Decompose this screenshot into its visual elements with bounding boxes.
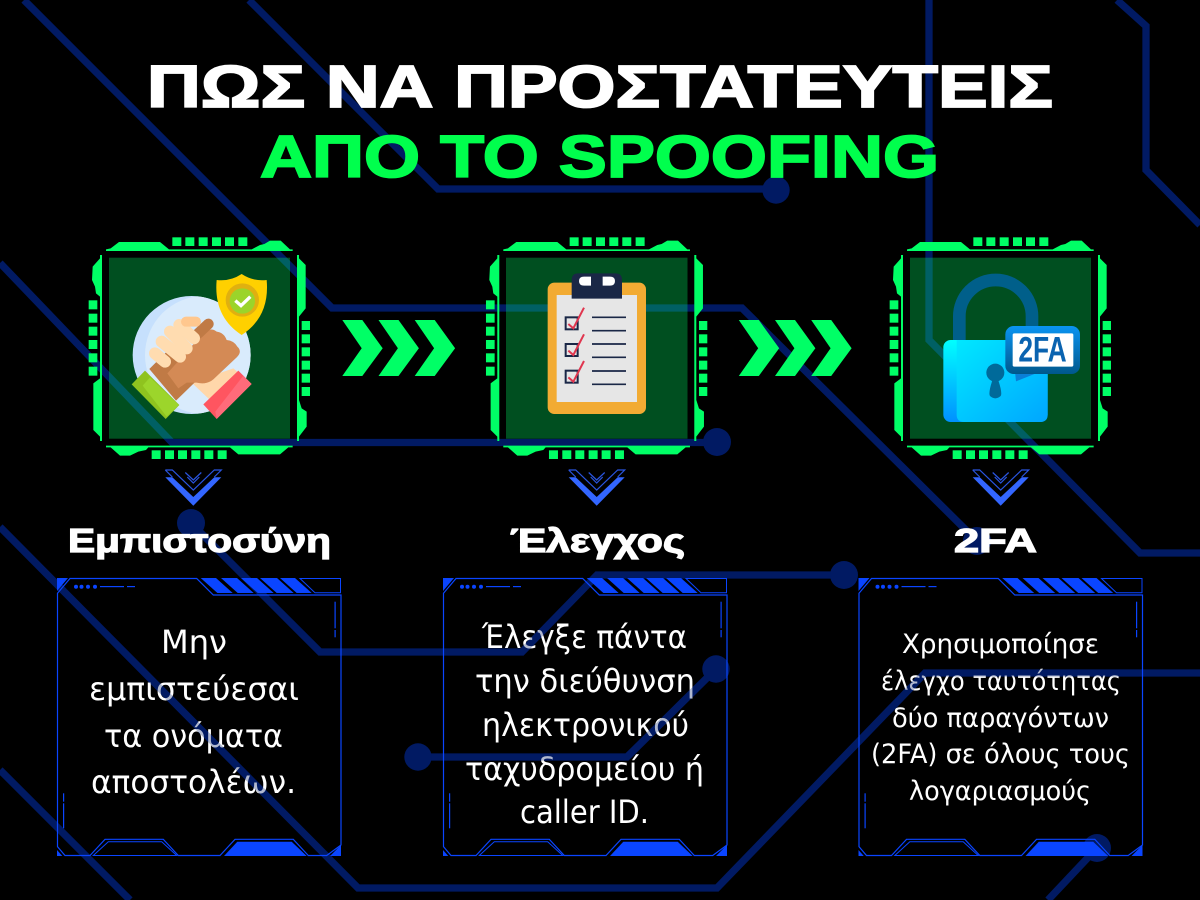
text block: trust: τα ονόματα <box>104 717 283 755</box>
card frame 1 <box>57 578 341 856</box>
text block: trust: αποστολέων. <box>91 763 296 801</box>
text block: 2FA: έλεγχο ταυτότητας <box>881 666 1121 697</box>
text block: check: caller ID. <box>520 793 649 831</box>
arrow: chevrons 1 <box>342 320 455 376</box>
icon tile <box>910 258 1091 439</box>
title line 2: ΑΠΟ ΤΟ SPOOFING <box>260 124 939 190</box>
heading: check: Έλεγχος <box>510 522 685 559</box>
icon frame <box>890 237 1111 459</box>
title line 1: ΠΩΣ ΝΑ ΠΡΟΣΤΑΤΕΥΤΕΙΣ <box>147 54 1053 120</box>
icon tile <box>109 258 290 439</box>
text block: trust <box>89 623 299 801</box>
icon: padlock with 2FA badge <box>943 280 1080 422</box>
line overlay dimming card text <box>149 630 1119 810</box>
icon tile <box>506 258 688 439</box>
text block: check: Έλεγξε πάντα <box>481 618 687 656</box>
text block: 2FA: Χρησιμοποίησε <box>902 629 1099 660</box>
text block: 2FA <box>871 629 1130 807</box>
heading: trust: Εμπιστοσύνη <box>68 522 331 559</box>
text block: 2FA: λογαριασμούς <box>909 776 1091 807</box>
arrow: down chevron 3 <box>973 470 1029 506</box>
arrow: down chevron 1 <box>165 470 221 506</box>
text block: trust: Μην <box>161 623 227 661</box>
arrow: down chevron 2 <box>569 470 625 506</box>
panel: trust icon <box>89 237 310 459</box>
panel: 2FA icon <box>890 237 1111 459</box>
text block: check: ταχυδρομείου ή <box>465 750 704 788</box>
text block: check <box>465 618 704 831</box>
panel: checklist icon <box>486 237 707 459</box>
text block: trust: εμπιστεύεσαι <box>89 670 299 708</box>
text block: 2FA: δύο παραγόντων <box>892 703 1109 734</box>
card frame 2 <box>443 578 727 856</box>
text block: check: την διεύθυνση <box>475 662 695 700</box>
icon frame <box>486 237 707 459</box>
text block: 2FA: (2FA) σε όλους τους <box>871 739 1130 770</box>
icon: padlock with 2FA badge: 2FA <box>1018 331 1067 370</box>
title <box>147 54 1053 190</box>
icon: clipboard checklist <box>548 273 646 414</box>
icon frame <box>89 237 310 459</box>
card frame 3 <box>858 578 1142 856</box>
heading: 2FA: 2FA <box>954 522 1037 559</box>
icon: handshake with shield <box>132 274 267 419</box>
arrow: chevrons 2 <box>739 320 852 376</box>
text block: check: ηλεκτρονικού <box>482 706 689 744</box>
